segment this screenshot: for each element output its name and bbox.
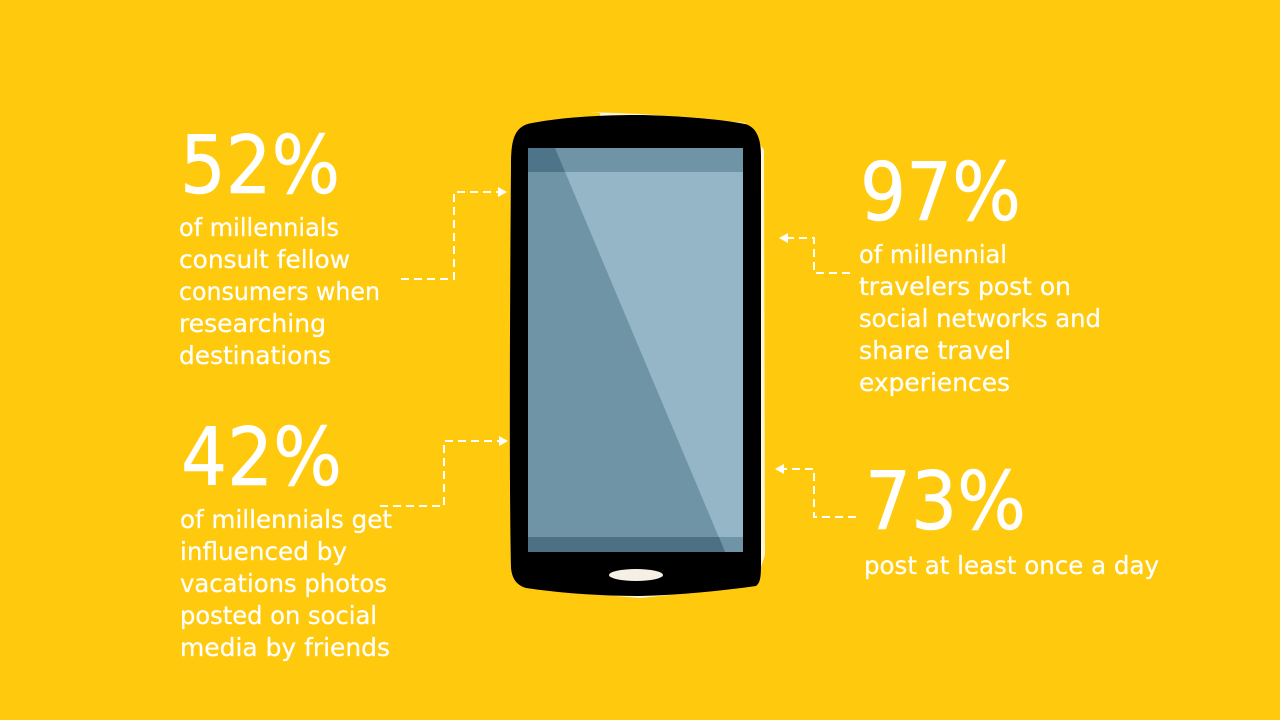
- description: 97%: [859, 240, 1101, 397]
- arrow: 52% to phone: [401, 187, 507, 279]
- stat: 97%: [859, 146, 1101, 397]
- description: 42%: [180, 505, 392, 662]
- stat: 42%: 42%: [181, 411, 342, 504]
- description: 42%: of millennials get: [180, 505, 392, 534]
- description: 97%: share travel: [859, 336, 1011, 365]
- stat: 42%: [180, 411, 392, 662]
- description: 97%: experiences: [859, 368, 1010, 397]
- stat: 52%: [179, 119, 380, 370]
- description: 97%: social networks and: [859, 304, 1101, 333]
- stat: 73%: [864, 455, 1159, 580]
- description: 97%: travelers post on: [859, 272, 1071, 301]
- screen: [528, 148, 743, 552]
- icon: smartphone: [510, 112, 765, 598]
- stat: 73%: 73%: [865, 455, 1026, 548]
- description: 52%: of millennials: [179, 213, 339, 242]
- stat: 52%: 52%: [180, 119, 340, 212]
- stat: 97%: 97%: [860, 146, 1021, 239]
- description: 97%: of millennial: [859, 240, 1007, 269]
- arrow: 97% to phone: [779, 233, 850, 273]
- description: 52%: researching: [179, 309, 326, 338]
- description: 52%: destinations: [179, 341, 331, 370]
- description: 42%: posted on social: [180, 601, 377, 630]
- description: 52%: [179, 213, 380, 370]
- description: 42%: influenced by: [180, 537, 347, 566]
- home button: [609, 569, 663, 581]
- description: 42%: media by friends: [180, 633, 390, 662]
- description: 42%: vacations photos: [180, 569, 387, 598]
- arrow: 73% to phone: [775, 464, 856, 517]
- description: 73%: post at least once a day: [864, 551, 1159, 580]
- arrow: 42% to phone: [380, 436, 508, 506]
- description: 52%: consumers when: [179, 277, 380, 306]
- description: 52%: consult fellow: [179, 245, 350, 274]
